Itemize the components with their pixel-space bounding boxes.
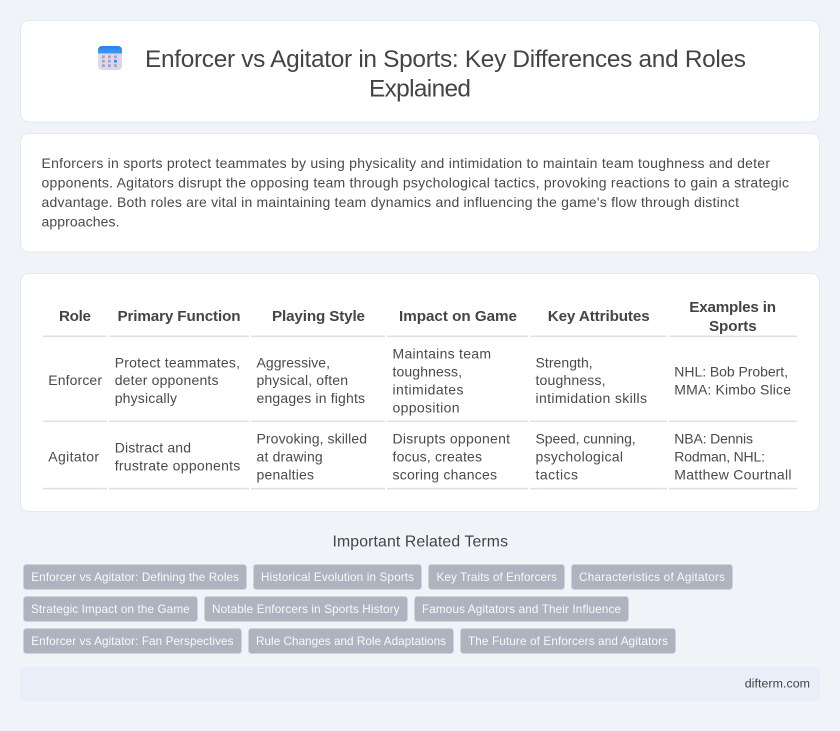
tag: key traits [428,564,564,590]
table row: Enforcer: Strength, [536,354,593,370]
tag: strategic impact [24,596,198,622]
intro text: Enforcers in sports protect teammates by using physicality and intimidation to maintain team toughness and deter [42,155,770,171]
tag: the future [460,628,676,654]
footer bar [20,667,820,701]
table row: Enforcer: toughness, [536,372,606,388]
tag: notable enforcers [204,596,408,622]
tag: characteristics: Characteristics of Agitators [579,571,725,584]
table row: Enforcer: toughness, [392,363,462,379]
table row: Agitator: Speed, cunning, [536,430,636,446]
table row: Enforcer: MMA: Kimbo Slice [674,381,791,397]
table header row: Primary Function [118,308,240,325]
table row: Enforcer: opposition [392,399,460,415]
tag: fan perspectives [24,628,242,654]
table row: Agitator: frustrate opponents [115,457,240,473]
table header row [43,299,797,337]
table row: Agitator: psychological [536,448,623,464]
tag: key traits: Key Traits of Enforcers [436,571,557,584]
intro text: opponents. Agitators disrupt the opposing team through psychological tactics, provoking reactions to gain a strategic [42,174,789,190]
table header row: Examples in [689,299,776,316]
table row: Agitator: Matthew Courtnall [674,466,792,482]
tag: rule changes [248,628,454,654]
table row: Enforcer: NHL: Bob Probert, [674,363,788,379]
table header row: Impact on Game [399,308,517,325]
tag: characteristics [572,564,732,590]
intro text [42,155,789,230]
title: Explained [369,76,471,102]
tag: strategic impact: Strategic Impact on the Game [31,603,190,616]
table row: Enforcer: intimidates [392,381,464,397]
table row: Agitator: Disrupts opponent [392,430,510,446]
intro text: advantage. Both roles are vital in maintaining team dynamics and influencing the game's flow through distinct [42,194,739,210]
tag: the future: The Future of Enforcers and Agitators [468,635,668,648]
table header row: Playing Style [272,308,365,325]
table row: Enforcer: physically [115,390,177,406]
table row: Agitator [43,430,797,489]
panel: introduction [20,134,820,252]
tag: defining the roles: Enforcer vs Agitator: Defining the Roles [31,571,239,584]
table row: Agitator: scoring chances [392,466,497,482]
tag: defining the roles [24,564,246,590]
table row: Enforcer: physical, often [256,372,348,388]
table row: Enforcer: engages in fights [256,390,365,406]
table row: Enforcer [43,345,797,422]
panel: header [20,20,820,122]
table row: Agitator: NBA: Dennis [674,430,753,446]
table row: Enforcer: Enforcer [48,372,102,388]
table row: Enforcer: deter opponents [115,372,218,388]
table row: Agitator: focus, creates [392,448,482,464]
title: Enforcer vs Agitator in Sports: Key Differences and Roles [145,46,746,73]
tag: fan perspectives: Enforcer vs Agitator: Fan Perspectives [31,635,234,648]
table row: Agitator: at drawing [256,448,323,464]
title [145,46,746,102]
tag: famous agitators: Famous Agitators and Their Influence [422,603,621,616]
table row: Enforcer: intimidation skills [536,390,647,406]
panel: comparison table [20,274,820,512]
table row: Agitator: Provoking, skilled [256,430,367,446]
table row: Enforcer: Protect teammates, [115,354,240,370]
related term tags [24,564,732,654]
table header row: Key Attributes [548,308,650,325]
table row: Agitator: penalties [256,466,314,482]
tag: historical evolution: Historical Evolution in Sports [261,571,414,584]
table row: Agitator: Rodman, NHL: [674,448,765,464]
table row: Enforcer: Maintains team [392,345,491,361]
footer bar: difterm.com [745,677,810,691]
icon: calendar [98,46,122,70]
heading: important related terms: Important Related Terms [332,534,508,551]
table row: Agitator: Agitator [48,448,99,464]
table row: Enforcer: Aggressive, [256,354,330,370]
tag: rule changes: Rule Changes and Role Adaptations [256,635,446,648]
table row: Agitator: tactics [536,466,578,482]
table header row: Sports [709,318,757,335]
tag: famous agitators [414,596,628,622]
table header row: Role [59,308,91,325]
tag: notable enforcers: Notable Enforcers in Sports History [212,603,400,616]
table row: Agitator: Distract and [115,439,191,455]
intro text: approaches. [42,214,120,230]
tag: historical evolution [254,564,422,590]
